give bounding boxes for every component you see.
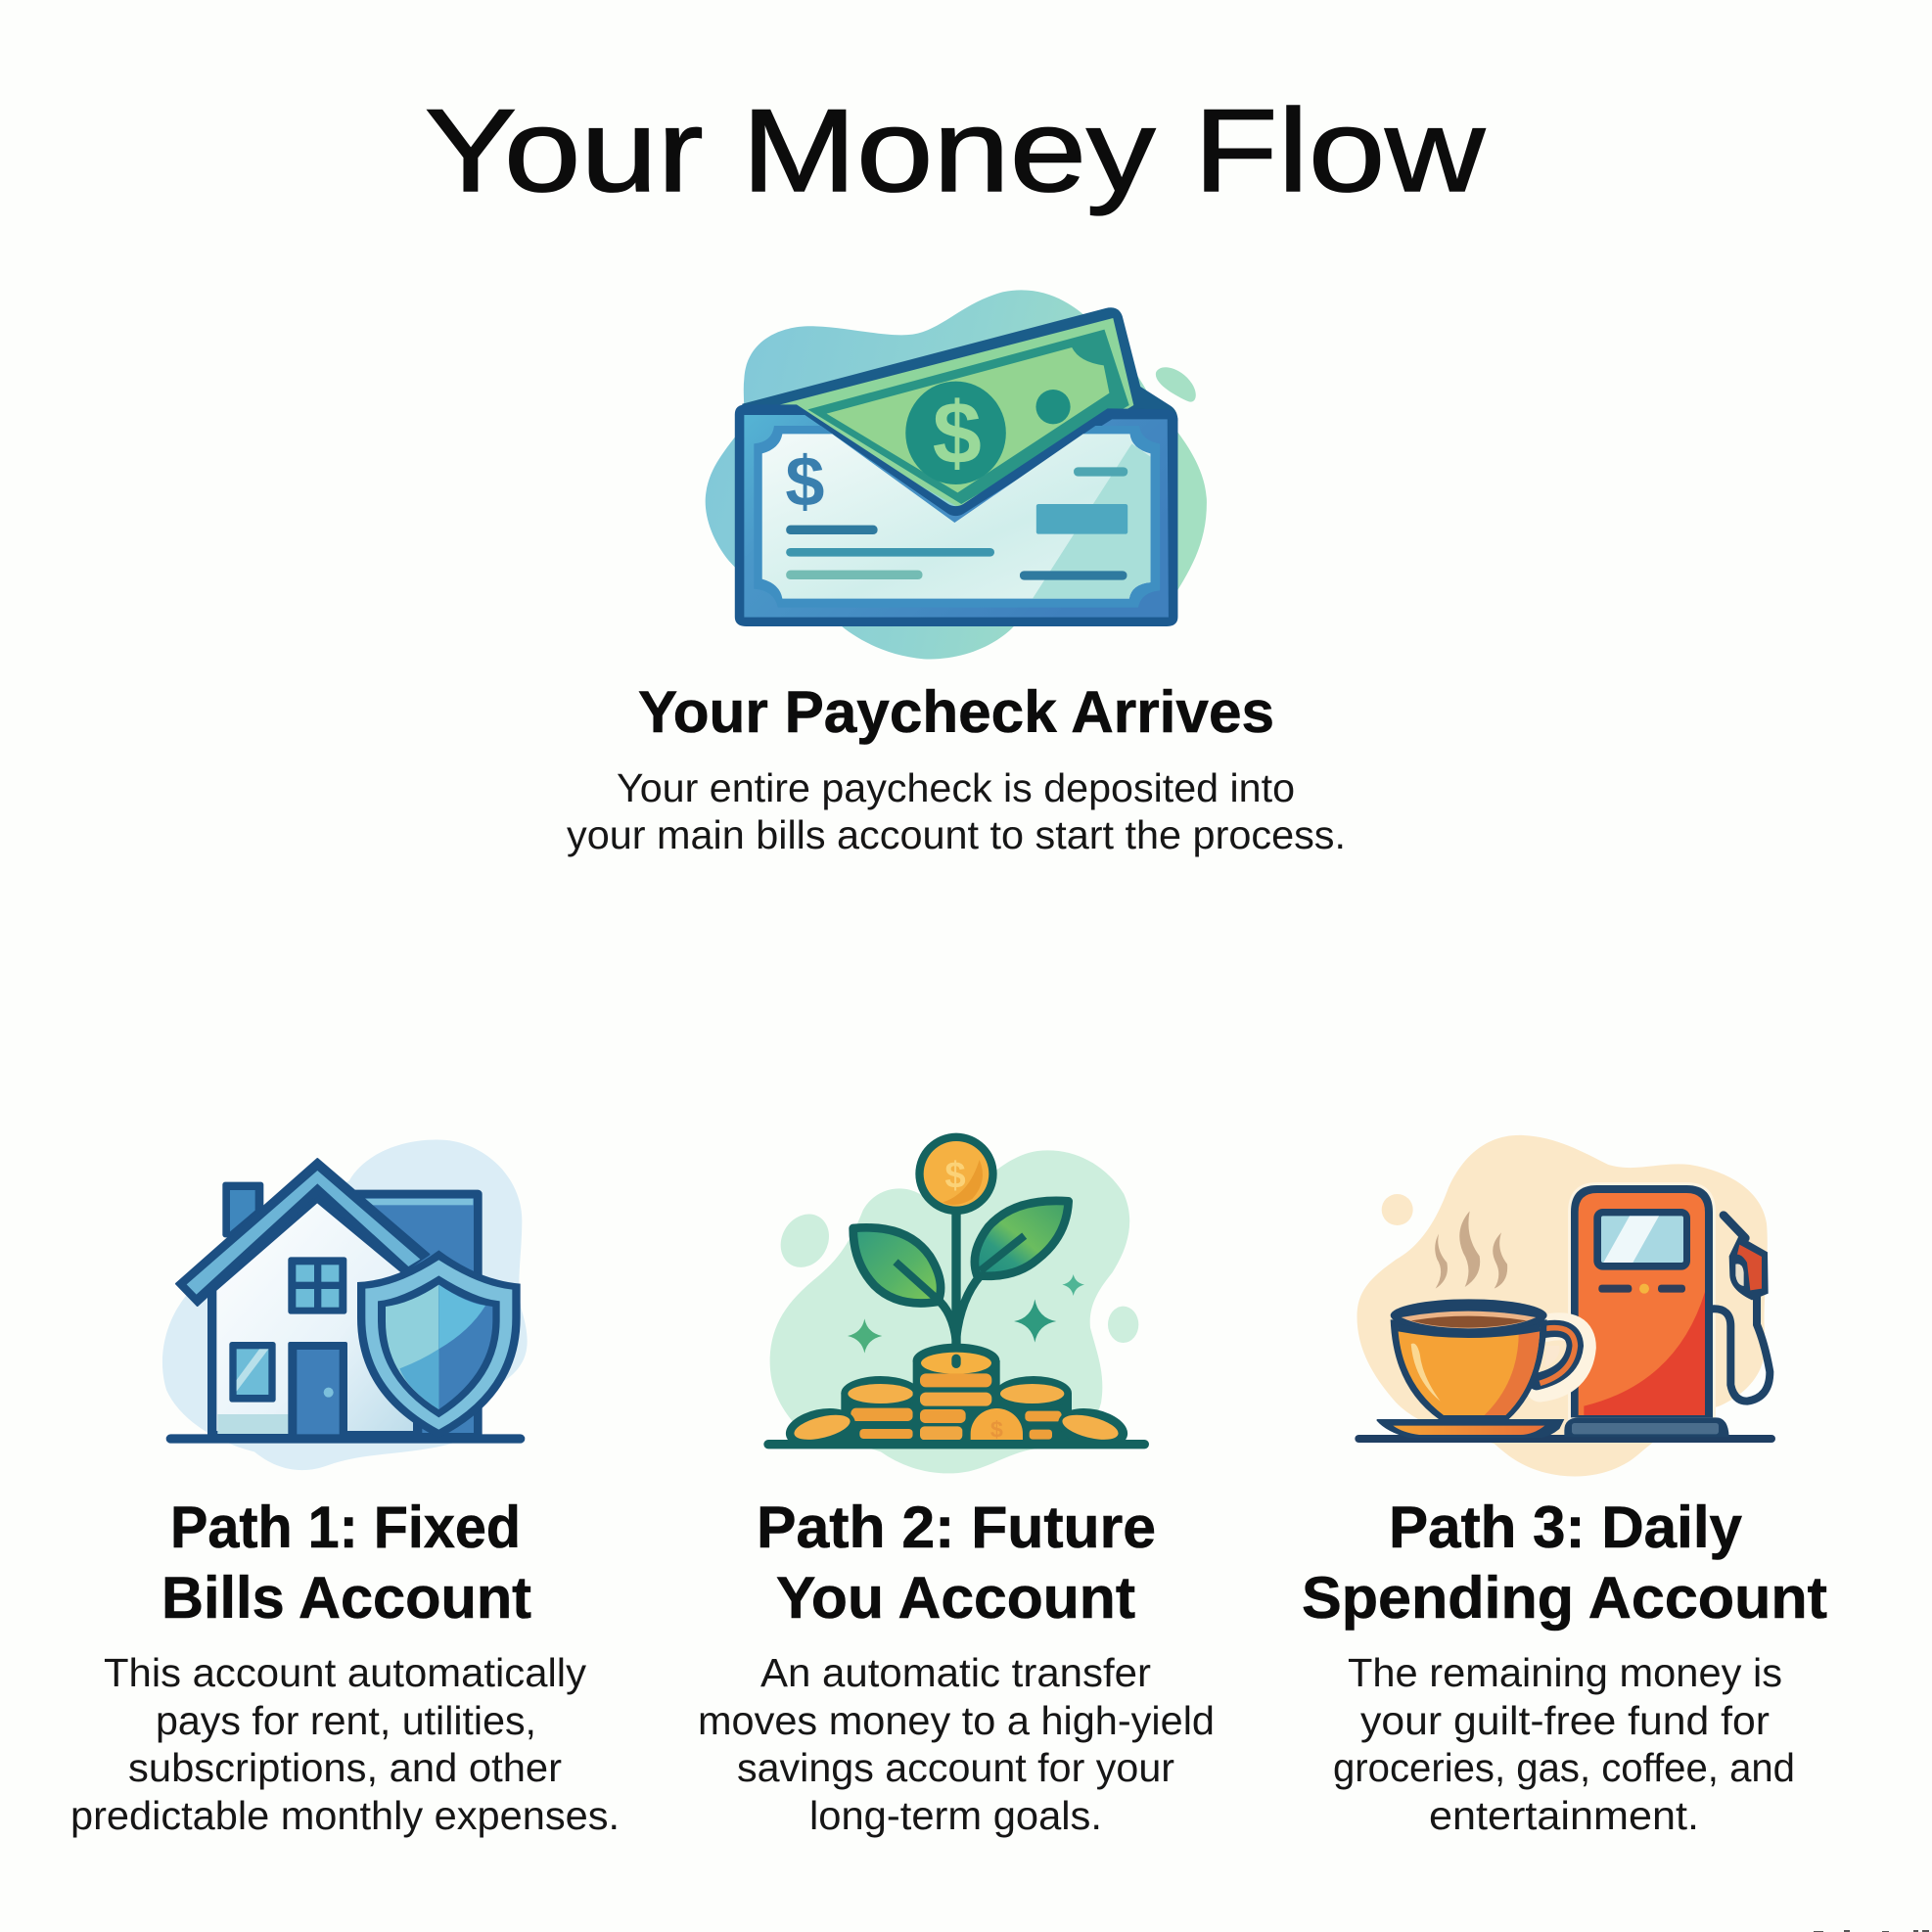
- heading: path 1: Bills Account: [161, 1565, 531, 1631]
- heading: path 2: You Account: [776, 1565, 1135, 1631]
- heading: path 3: Path 3: Daily: [1389, 1495, 1743, 1560]
- icon: plant growing from coins: [768, 1133, 1144, 1473]
- text block: path 1 description: predictable monthly expenses.: [70, 1793, 620, 1838]
- heading: path 2: Path 2: Future: [757, 1495, 1156, 1560]
- text block: path 2 description: An automatic transfer: [760, 1650, 1151, 1695]
- heading: path 2: [757, 1495, 1156, 1631]
- text block: paycheck description: your main bills account to start the process.: [567, 812, 1346, 857]
- heading: path 1: [161, 1495, 531, 1631]
- icon: paycheck and dollar bill: $: [933, 385, 982, 483]
- text block: paycheck description: Your entire paycheck is deposited into: [617, 765, 1295, 810]
- text block: path 2 description: savings account for your: [737, 1745, 1174, 1790]
- icon: paycheck and dollar bill: $: [785, 443, 824, 522]
- text block: path 2 description: long-term goals.: [809, 1793, 1102, 1838]
- panel: path 1 fixed bills account: [70, 1140, 620, 1838]
- text block: path 1 description: subscriptions, and other: [128, 1745, 562, 1790]
- text block: path 1 description: [70, 1650, 620, 1838]
- heading: path 1: Path 1: Fixed: [170, 1495, 521, 1560]
- heading: path 3: Spending Account: [1302, 1565, 1827, 1631]
- heading: path 3: [1302, 1495, 1827, 1631]
- panel: your paycheck arrives: [567, 290, 1346, 857]
- heading: your paycheck arrives: Your Paycheck Arrives: [638, 679, 1274, 745]
- icon: plant growing from coins: $: [990, 1416, 1003, 1442]
- icon: coffee cup and gas pump: [1357, 1135, 1771, 1477]
- text block: path 3 description: your guilt-free fund for: [1360, 1698, 1770, 1743]
- text block: path 3 description: groceries, gas, coffee, and: [1333, 1745, 1795, 1790]
- panel: path 2 future you account: [698, 1133, 1215, 1838]
- icon: paycheck and dollar bill: [706, 290, 1207, 659]
- text block: path 1 description: This account automatically: [104, 1650, 586, 1695]
- text block: path 2 description: moves money to a high-yield: [698, 1698, 1215, 1743]
- text block: paycheck description: [567, 765, 1346, 857]
- icon: house with shield: [162, 1140, 528, 1470]
- text block: path 1 description: pays for rent, utilities,: [156, 1698, 536, 1743]
- text block: path 2 description: [698, 1650, 1215, 1838]
- text block: path 3 description: entertainment.: [1429, 1793, 1699, 1838]
- panel: path 3 daily spending account: [1302, 1135, 1827, 1838]
- title: Your Money Flow: [425, 85, 1485, 216]
- text block: path 3 description: [1333, 1650, 1795, 1838]
- icon: plant growing from coins: $: [944, 1154, 966, 1196]
- text block: path 3 description: The remaining money is: [1348, 1650, 1782, 1695]
